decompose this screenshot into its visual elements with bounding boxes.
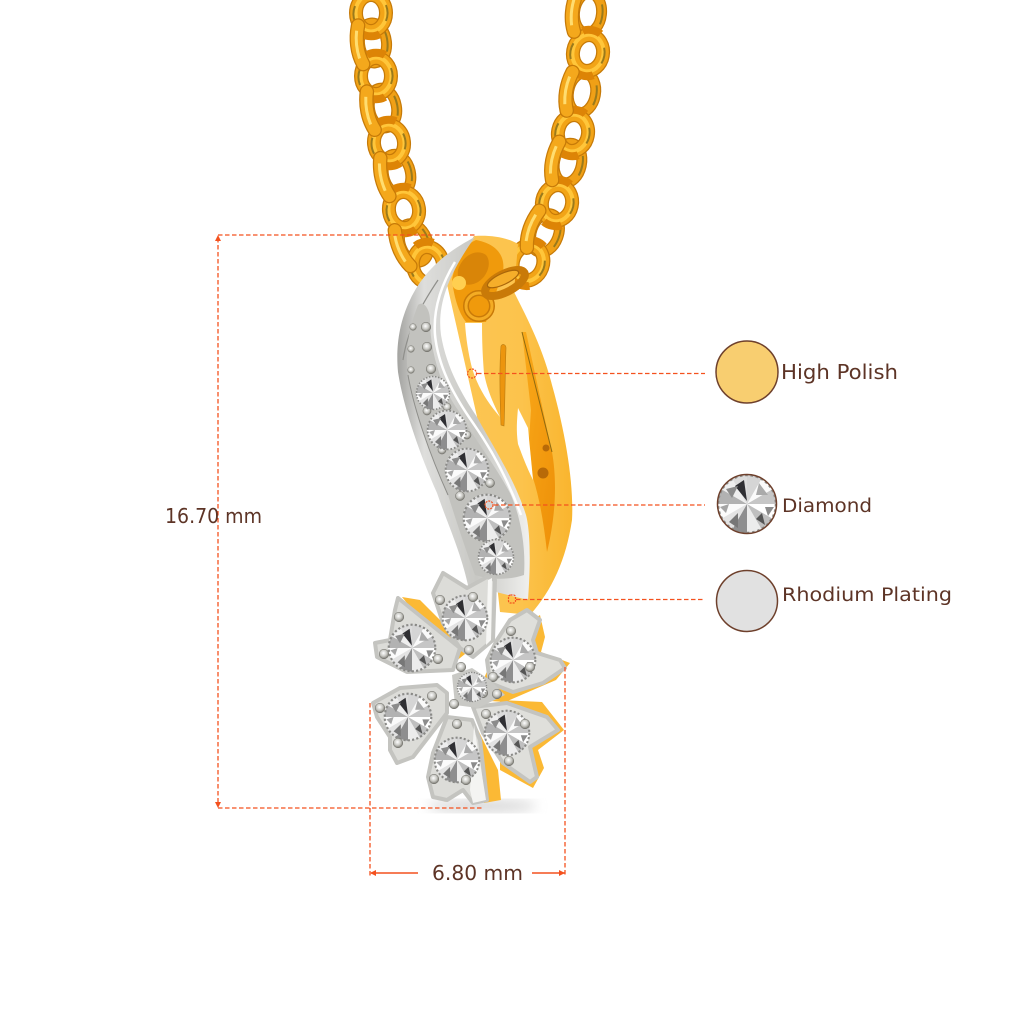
chain: right strand	[504, 0, 608, 290]
jump ring	[466, 293, 492, 319]
window right	[517, 408, 533, 480]
callout: high polish	[468, 341, 898, 403]
petal: lower right	[473, 703, 558, 782]
pendant: flower petals	[373, 573, 565, 803]
slit	[500, 345, 506, 426]
petal: bottom	[428, 717, 487, 803]
pendant: gold back body	[446, 236, 572, 615]
petal: top	[433, 573, 495, 657]
band diamonds	[416, 376, 514, 575]
dimension: width 6.80 mm	[370, 667, 565, 885]
window left	[465, 323, 500, 417]
petal: upper right	[487, 610, 565, 692]
petal: upper left	[375, 598, 460, 672]
soft shadow under pendant	[427, 800, 537, 812]
callout: rhodium plating	[508, 570, 952, 632]
dimension: height 16.70 mm: 16.70 mm	[165, 504, 262, 528]
dimension: width 6.80 mm: 6.80 mm	[432, 861, 523, 885]
callout: diamond	[485, 474, 872, 534]
orange interior	[522, 332, 555, 552]
pendant: gold flower backing	[402, 575, 570, 803]
pendant: rhodium wave band	[397, 237, 530, 600]
bail interior	[452, 240, 503, 322]
dimension: height 16.70 mm	[165, 235, 484, 808]
band prongs	[408, 322, 495, 501]
callout: diamond: Diamond	[782, 496, 872, 517]
callout: rhodium plating: Rhodium Plating	[782, 585, 952, 606]
flower centre	[449, 662, 505, 709]
callout: high polish: High Polish	[781, 360, 898, 384]
petal: lower left	[373, 685, 447, 763]
chain: left strand	[354, 0, 448, 291]
